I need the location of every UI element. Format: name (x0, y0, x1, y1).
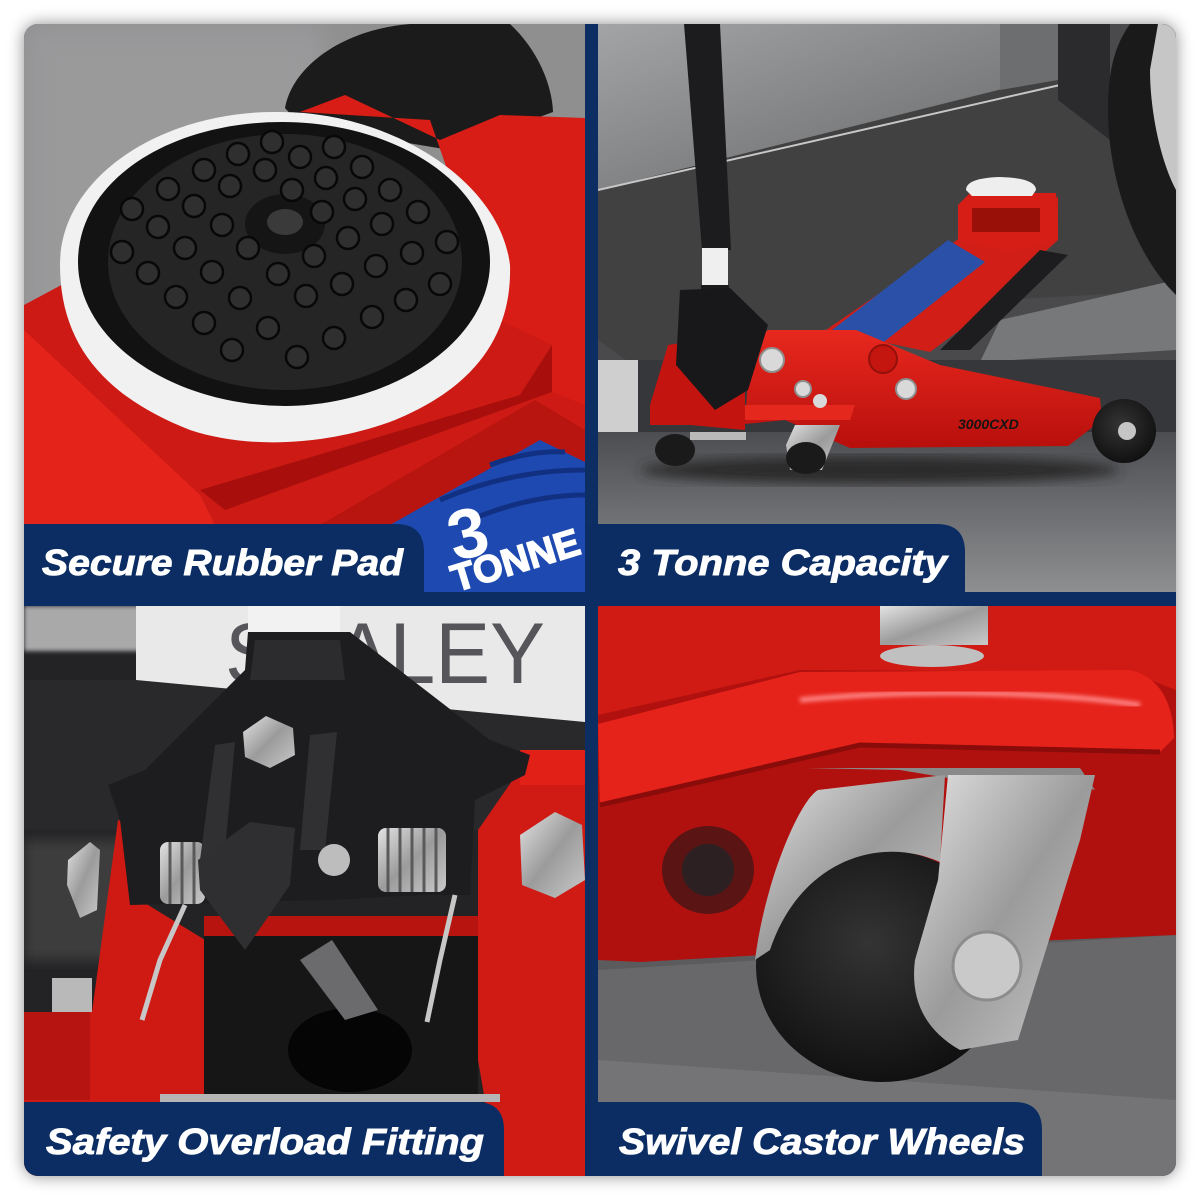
icon: red trolley jack (650, 24, 1156, 474)
blue capacity sticker (390, 440, 585, 592)
panel: safety overload fitting photo (24, 606, 585, 1176)
icon: swivel castor wheel (755, 768, 1095, 1082)
car door (598, 24, 1000, 189)
label: secure rubber pad (24, 524, 585, 606)
rubber studs (111, 131, 458, 368)
label: safety overload fitting (24, 1102, 504, 1176)
red jack side (598, 606, 1176, 962)
clips (200, 742, 235, 860)
icon: rubber pad with white ring (60, 112, 510, 442)
panel: secure rubber pad photo (24, 24, 585, 601)
square block (198, 822, 295, 950)
model text: 3000CXD (958, 416, 1019, 432)
label: 3 tonne capacity (585, 524, 1176, 606)
panel: 3 tonne capacity photo (598, 24, 1176, 592)
icon: black safety mechanism (108, 632, 530, 1022)
red jack body (300, 95, 585, 420)
plate lettering: SEALEY (225, 606, 545, 702)
piston rod (300, 940, 378, 1020)
wall behind jack (638, 360, 1176, 432)
rear wheel (1092, 399, 1156, 463)
label: swivel castor wheels (585, 1102, 1042, 1176)
icon: black wheel behind pad (285, 24, 553, 150)
icon: car tyre (1108, 24, 1176, 295)
red folded flange (598, 670, 1174, 805)
side bolt (662, 826, 754, 914)
wire clips (142, 905, 185, 1020)
large side bolt (520, 812, 585, 898)
label: 3 tonne capacity: 3 Tonne Capacity (618, 542, 949, 583)
red frame right (478, 755, 585, 1176)
grille background (24, 680, 585, 830)
underbody detail (980, 280, 1176, 362)
handle (684, 24, 731, 250)
spring right (378, 828, 446, 892)
floor (598, 935, 1176, 1176)
dark pump block (204, 935, 478, 1100)
garage floor (598, 432, 1176, 592)
icon: hex nut (880, 606, 988, 667)
red frame left (24, 820, 205, 1176)
label: swivel castor wheels: Swivel Castor Wheels (619, 1121, 1025, 1162)
panel: secure rubber pad photo: 3 (439, 491, 496, 576)
front castor (786, 425, 840, 470)
front fork (650, 340, 745, 430)
panel: secure rubber pad photo: TONNE (446, 522, 585, 601)
label: secure rubber pad: Secure Rubber Pad (42, 542, 404, 583)
number plate (136, 606, 585, 722)
label: safety overload fitting: Safety Overload Fitting (46, 1121, 484, 1162)
spring left (160, 842, 205, 904)
lift arm with blue label (826, 196, 1058, 352)
hex bolt (243, 716, 295, 768)
saddle (966, 177, 1036, 196)
panel: swivel castor wheels photo (598, 606, 1176, 1176)
frame (745, 330, 1102, 448)
white shaft (248, 606, 340, 632)
